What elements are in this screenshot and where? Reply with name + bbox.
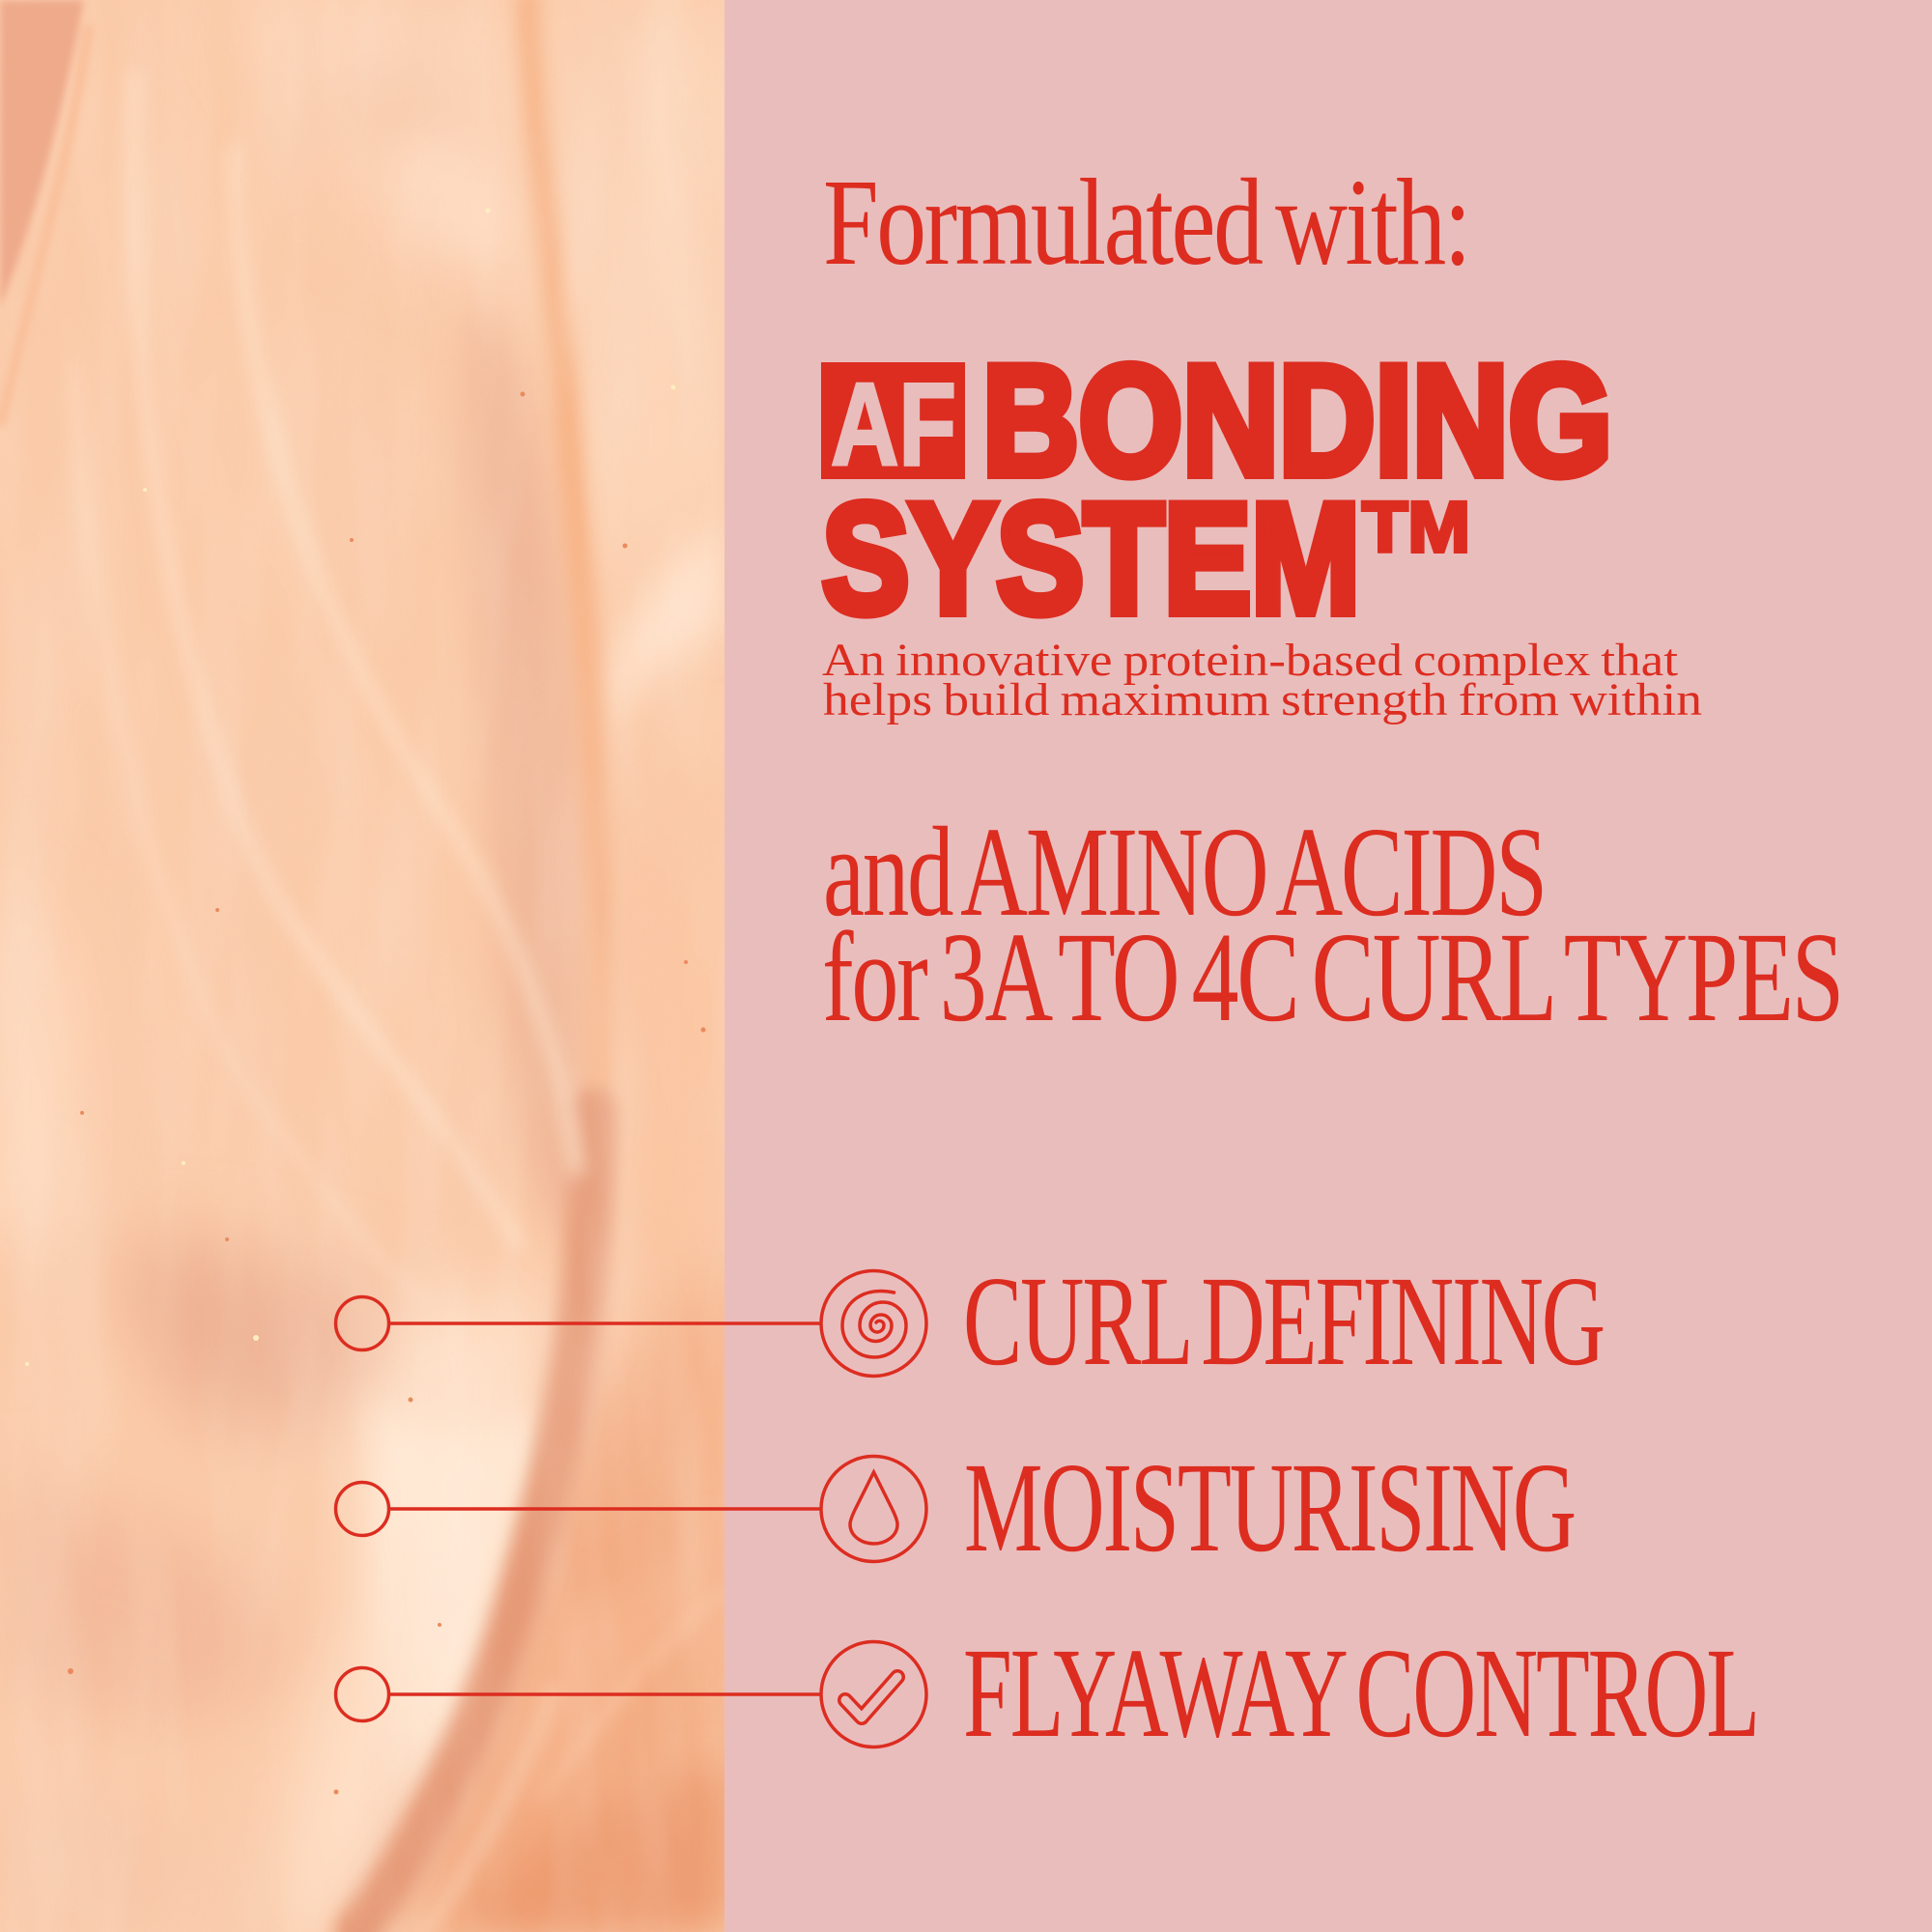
logo badge: AF: AF <box>831 358 956 490</box>
label: moisturising: MOISTURISING <box>964 1435 1575 1578</box>
logo: AF Bonding System <box>821 333 1612 646</box>
callout marker and leader line <box>336 1296 820 1350</box>
logo word: BONDING: BONDING <box>982 333 1612 508</box>
description text <box>822 635 1702 725</box>
label: curl defining: CURL DEFINING <box>963 1249 1604 1392</box>
icon: check mark <box>821 1642 926 1747</box>
panel: pink background <box>724 0 1932 1932</box>
benefit: moisturising <box>336 1435 1575 1578</box>
heading: formulated with: Formulated with: <box>823 154 1469 291</box>
benefit: curl defining <box>336 1249 1604 1392</box>
icon: spiral <box>821 1271 926 1376</box>
callout marker and leader line <box>336 1482 820 1536</box>
logo word: SYSTEM: SYSTEM <box>822 471 1360 646</box>
description text: An innovative protein-based complex that <box>822 635 1679 686</box>
description text: helps build maximum strength from within <box>823 674 1702 725</box>
photo: dark corner <box>0 0 89 425</box>
trademark: TM <box>1362 487 1470 567</box>
callout marker and leader line <box>336 1667 820 1721</box>
benefit: flyaway control <box>336 1621 1758 1764</box>
icon: water drop <box>821 1457 926 1561</box>
subheading: amino acids and curl types: and AMINO ACIDS <box>823 800 1546 943</box>
subheading: amino acids and curl types <box>822 800 1842 1048</box>
photo: peach cream texture <box>0 0 724 1932</box>
